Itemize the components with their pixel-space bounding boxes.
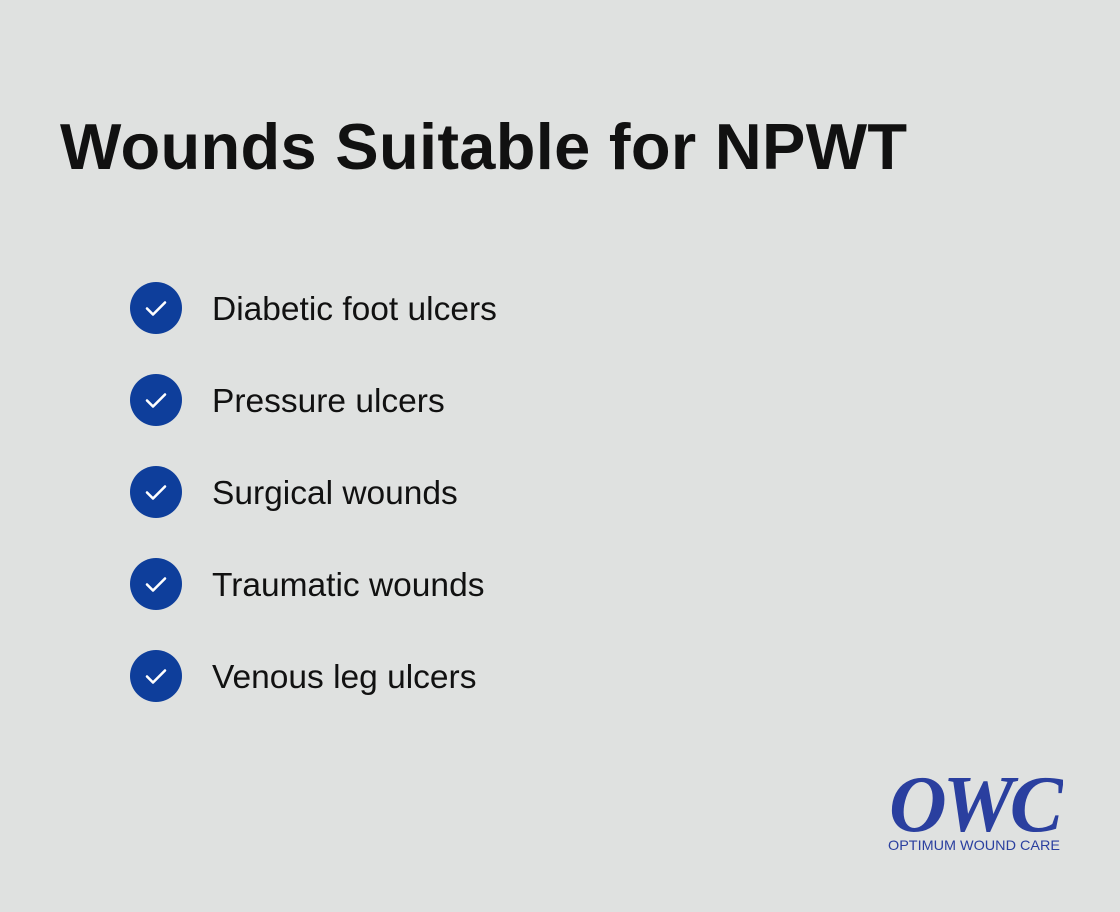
item: venous leg ulcers — [130, 650, 476, 702]
item: surgical wounds: Surgical wounds — [212, 475, 458, 512]
item: traumatic wounds — [130, 558, 484, 610]
item: pressure ulcers: Pressure ulcers — [212, 383, 445, 420]
item: pressure ulcers — [130, 374, 445, 426]
logo: OWC Optimum Wound Care: OPTIMUM WOUND CARE — [888, 837, 1060, 853]
item: venous leg ulcers: Venous leg ulcers — [212, 659, 476, 696]
item: traumatic wounds: Traumatic wounds — [212, 567, 484, 604]
checklist — [130, 282, 497, 702]
title: Wounds Suitable for NPWT — [60, 110, 907, 183]
item: diabetic foot ulcers: Diabetic foot ulcers — [212, 291, 497, 328]
item: diabetic foot ulcers — [130, 282, 497, 334]
item: surgical wounds — [130, 466, 458, 518]
